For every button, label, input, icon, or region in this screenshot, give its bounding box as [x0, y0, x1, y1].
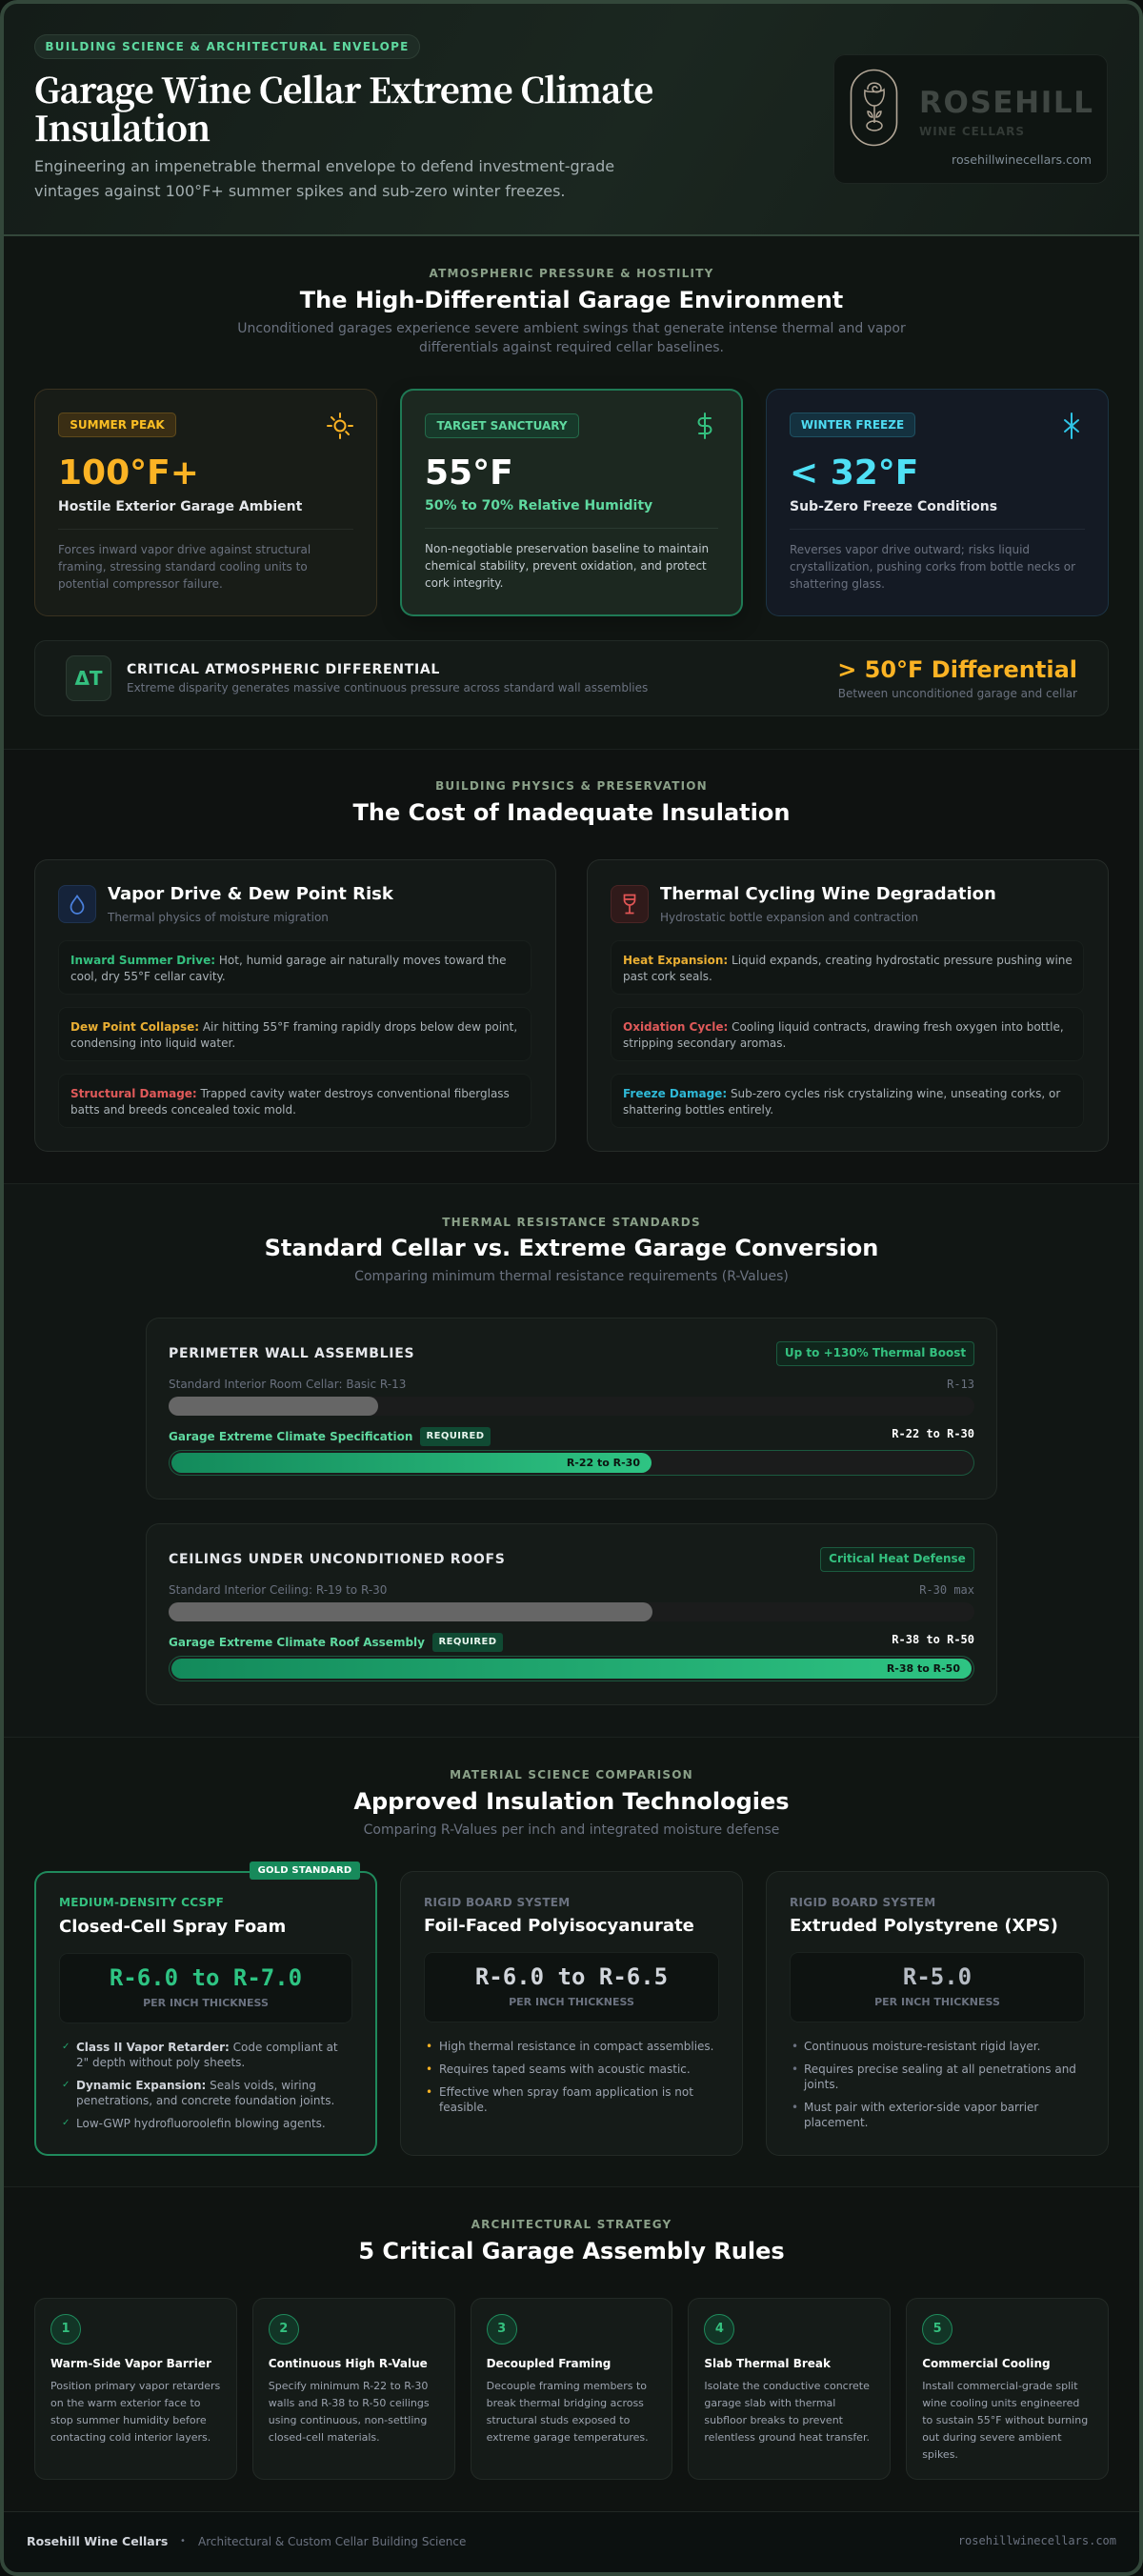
bullet list: Class II Vapor Retarder: Code compliant at [76, 2041, 338, 2054]
item: inward summer drive: Inward Summer Drive: Hot, humid garage air naturally moves toward the [70, 954, 507, 967]
rule text: out during severe ambient [922, 2431, 1062, 2444]
callout title: CRITICAL ATMOSPHERIC DIFFERENTIAL [127, 662, 440, 677]
section: garage environment [0, 236, 1143, 749]
bullet list: • [792, 2101, 798, 2114]
rule text: garage slab with thermal [704, 2397, 835, 2409]
callout: critical differential [34, 640, 1109, 716]
footer [4, 2511, 1139, 2572]
panel: vapor drive [34, 859, 556, 1152]
tag: TARGET SANCTUARY [436, 419, 568, 433]
item: oxidation cycle [611, 1007, 1084, 1061]
rule text: extreme garage temperatures. [487, 2431, 649, 2444]
R-value box [790, 1952, 1085, 2023]
unit: PER INCH THICKNESS [509, 1996, 634, 2008]
tag [58, 413, 176, 437]
rule text: structural studs exposed to [487, 2414, 630, 2426]
rule text [487, 2380, 649, 2444]
panel title: CEILINGS UNDER UNCONDITIONED ROOFS [169, 1552, 506, 1567]
bullet list: placement. [804, 2116, 868, 2129]
bullet list: feasible. [439, 2101, 488, 2114]
item: structural damage [58, 1074, 531, 1128]
rule 2 [252, 2298, 455, 2480]
badge: gold standard [250, 1862, 360, 1880]
panel: polyisocyanurate [400, 1871, 743, 2156]
panel title: PERIMETER WALL ASSEMBLIES [169, 1346, 414, 1361]
section eyebrow: MATERIAL SCIENCE COMPARISON [450, 1768, 693, 1781]
rule 1 [34, 2298, 237, 2480]
rule text: stop summer humidity before [50, 2414, 207, 2426]
item: freeze damage: shattering bottles entirely. [623, 1103, 773, 1117]
panel: winter freeze [766, 389, 1109, 616]
callout tag [776, 1341, 974, 1366]
subtitle: Hostile Exterior Garage Ambient [58, 499, 302, 514]
standard label: Standard Interior Ceiling: R-19 to R-30 [169, 1583, 387, 1597]
rule text: subfloor breaks to prevent [704, 2414, 843, 2426]
garage bar [169, 1656, 974, 1681]
bullet list: joints. [804, 2078, 838, 2091]
logo url: rosehillwinecellars.com [952, 152, 1092, 167]
rule title: Slab Thermal Break [704, 2357, 831, 2370]
item: oxidation cycle: stripping secondary aromas. [623, 1036, 786, 1050]
rule text: relentless ground heat transfer. [704, 2431, 870, 2444]
category: MEDIUM-DENSITY CCSPF [59, 1896, 224, 1909]
panel: thermal cycling [587, 859, 1109, 1152]
rule text [269, 2380, 430, 2444]
garage label: Garage Extreme Climate Specification [169, 1430, 412, 1443]
rule text: Isolate the conductive concrete [704, 2380, 870, 2392]
rule text: on the warm exterior face to [50, 2397, 200, 2409]
rule text: using continuous, non-settling [269, 2414, 427, 2426]
R-value: R-5.0 [903, 1963, 972, 1990]
item: heat expansion [611, 940, 1084, 995]
header subtitle: Engineering an impenetrable thermal envelope to defend investment-grade [34, 157, 614, 175]
panel: extruded polystyrene [766, 1871, 1109, 2156]
panel: perimeter wall assemblies [146, 1318, 997, 1499]
description [58, 543, 311, 591]
icon: delta T [66, 655, 111, 701]
section heading: Standard Cellar vs. Extreme Garage Conversion [265, 1235, 878, 1261]
rule text [50, 2380, 220, 2444]
garage value: R-22 to R-30 [892, 1427, 974, 1440]
number badge [704, 2314, 734, 2345]
description: cork integrity. [425, 576, 503, 590]
R-value: R-6.0 to R-7.0 [110, 1964, 302, 1991]
panel title: Vapor Drive & Dew Point Risk [108, 884, 393, 904]
bullet list: Continuous moisture-resistant rigid layer. [804, 2040, 1040, 2053]
item: structural damage: Structural Damage: Trapped cavity water destroys conventional fiberglass [70, 1087, 510, 1100]
standard bar [169, 1397, 974, 1416]
subtitle: 50% to 70% Relative Humidity [425, 498, 652, 513]
differential note: Between unconditioned garage and cellar [838, 687, 1077, 700]
description: potential compressor failure. [58, 577, 223, 591]
logo mark and wordmark: WINE CELLARS [919, 125, 1024, 138]
footer brand: Rosehill Wine Cellars [27, 2534, 168, 2548]
rule title: Continuous High R-Value [269, 2357, 428, 2370]
rule text: Decouple framing members to [487, 2380, 647, 2392]
number badge [922, 2314, 952, 2345]
section: insulation technologies [0, 1737, 1143, 2186]
garage label: Garage Extreme Climate Roof Assembly [169, 1636, 425, 1649]
rule 5 [906, 2298, 1109, 2480]
section eyebrow: ARCHITECTURAL STRATEGY [471, 2218, 672, 2231]
temperature: 100°F+ [58, 453, 199, 493]
bullet list: penetrations, and concrete foundation joints. [76, 2094, 334, 2107]
section: cost of inadequate insulation [0, 749, 1143, 1183]
tag [425, 413, 579, 438]
section heading: 5 Critical Garage Assembly Rules [358, 2238, 785, 2264]
description: shattering glass. [790, 577, 885, 591]
panel title: Thermal Cycling Wine Degradation [660, 884, 996, 904]
header subtitle: vintages against 100°F+ summer spikes and sub-zero winter freezes. [34, 182, 566, 200]
description: chemical stability, prevent oxidation, and protect [425, 559, 707, 573]
main title [34, 65, 653, 151]
rule title: Decoupled Framing [487, 2357, 611, 2370]
bullet list: Effective when spray foam application is not [439, 2085, 693, 2099]
differential value: > 50°F Differential [837, 656, 1077, 683]
section description [237, 321, 906, 355]
bullet list: • [792, 2063, 798, 2076]
item: freeze damage: Freeze Damage: Sub-zero cycles risk crystalizing wine, unseating corks, or [623, 1087, 1060, 1100]
icon: sun [327, 413, 353, 439]
logo panel [833, 54, 1108, 184]
rule 4 [688, 2298, 891, 2480]
section: standard vs extreme [0, 1183, 1143, 1737]
callout tag: Up to +130% Thermal Boost [785, 1346, 966, 1359]
rule text [704, 2380, 870, 2444]
standard label: Standard Interior Room Cellar: Basic R-13 [169, 1378, 406, 1391]
icon: droplet [58, 885, 96, 923]
bullet list: ✓ [62, 2042, 70, 2052]
title: Extruded Polystyrene (XPS) [790, 1916, 1058, 1936]
item: freeze damage [611, 1074, 1084, 1128]
callout tag [820, 1547, 974, 1572]
required badge: REQUIRED [439, 1637, 496, 1647]
bullet list: Low-GWP hydrofluoroolefin blowing agents. [76, 2117, 326, 2130]
bullet list: Requires precise sealing at all penetrations and [804, 2063, 1076, 2076]
section eyebrow: BUILDING PHYSICS & PRESERVATION [435, 779, 708, 793]
item: dew point collapse [58, 1007, 531, 1061]
main title: Garage Wine Cellar Extreme Climate [34, 65, 653, 113]
section eyebrow: THERMAL RESISTANCE STANDARDS [442, 1216, 701, 1229]
section: assembly rules [0, 2186, 1143, 2511]
number badge: 1 [61, 2322, 70, 2336]
bullet list: ✓ [62, 2118, 70, 2128]
category: RIGID BOARD SYSTEM [424, 1896, 571, 1909]
rule text: break thermal bridging across [487, 2397, 644, 2409]
rule text [922, 2380, 1088, 2461]
tag: WINTER FREEZE [801, 418, 904, 432]
bullet list: • [426, 2063, 432, 2076]
number badge: 5 [933, 2322, 942, 2336]
rule text: closed-cell materials. [269, 2431, 380, 2444]
icon: dollar [697, 413, 712, 439]
bullet list [426, 2040, 714, 2114]
section eyebrow: ATMOSPHERIC PRESSURE & HOSTILITY [430, 267, 713, 280]
title: Foil-Faced Polyisocyanurate [424, 1916, 694, 1936]
icon: snowflake [1064, 413, 1079, 439]
description: Non-negotiable preservation baseline to maintain [425, 542, 709, 555]
section heading: The High-Differential Garage Environment [300, 287, 843, 313]
item: inward summer drive [58, 940, 531, 995]
header subtitle [34, 157, 614, 200]
rule text: contacting cold interior layers. [50, 2431, 211, 2444]
bullet list: • [426, 2040, 432, 2053]
R-value: R-6.0 to R-6.5 [475, 1963, 668, 1990]
item: oxidation cycle: Oxidation Cycle: Cooling liquid contracts, drawing fresh oxygen into bottle, [623, 1020, 1064, 1034]
R-value box [59, 1953, 352, 2023]
section subtitle: Comparing R-Values per inch and integrated moisture defense [364, 1822, 779, 1838]
item: heat expansion: past cork seals. [623, 970, 712, 983]
bullet list: Requires taped seams with acoustic mastic. [439, 2063, 691, 2076]
rule 3 [471, 2298, 672, 2480]
temperature: 55°F [425, 453, 513, 493]
R-value box [424, 1952, 719, 2023]
description [790, 543, 1076, 591]
rule text: Specify minimum R-22 to R-30 [269, 2380, 428, 2392]
title: Closed-Cell Spray Foam [59, 1917, 286, 1937]
unit: PER INCH THICKNESS [874, 1996, 1000, 2008]
description: framing, stressing standard cooling units to [58, 560, 308, 574]
bullet list [792, 2040, 1076, 2129]
bullet list: • [792, 2040, 798, 2053]
tag [790, 413, 915, 437]
description: Reverses vapor drive outward; risks liquid [790, 543, 1030, 556]
panel subtitle: Hydrostatic bottle expansion and contraction [660, 911, 918, 924]
panel: summer peak [34, 389, 377, 616]
item: dew point collapse: Dew Point Collapse: Air hitting 55°F framing rapidly drops below dew point, [70, 1020, 517, 1034]
description [425, 542, 709, 590]
required badge [420, 1427, 491, 1446]
bullet list: ✓ [62, 2080, 70, 2090]
rule text: walls and R-38 to R-50 ceilings [269, 2397, 430, 2409]
rule title: Commercial Cooling [922, 2357, 1051, 2370]
category: RIGID BOARD SYSTEM [790, 1896, 936, 1909]
standard value: R-13 [947, 1378, 974, 1391]
description: Forces inward vapor drive against structural [58, 543, 311, 556]
footer separator: • [180, 2536, 186, 2546]
rule title: Warm-Side Vapor Barrier [50, 2357, 211, 2370]
section subtitle: Comparing minimum thermal resistance requirements (R-Values) [354, 1269, 789, 1284]
subtitle: Sub-Zero Freeze Conditions [790, 499, 997, 514]
section heading: Approved Insulation Technologies [353, 1788, 790, 1815]
rule text: spikes. [922, 2448, 958, 2461]
bullet list: Dynamic Expansion: Seals voids, wiring [76, 2079, 316, 2092]
bullet list: 2" depth without poly sheets. [76, 2056, 245, 2069]
header [4, 4, 1139, 236]
callout tag: Critical Heat Defense [829, 1552, 966, 1565]
main title: Insulation [34, 103, 211, 151]
number badge [269, 2314, 299, 2345]
panel subtitle: Thermal physics of moisture migration [108, 911, 329, 924]
required badge: REQUIRED [427, 1431, 484, 1441]
unit: PER INCH THICKNESS [143, 1997, 269, 2009]
icon: delta T: ΔT [74, 667, 103, 690]
garage value: R-38 to R-50 [892, 1633, 974, 1646]
header badge [34, 34, 420, 59]
rule text: to sustain 55°F without burning [922, 2414, 1088, 2426]
number badge [50, 2314, 81, 2345]
rule text: Install commercial-grade split [922, 2380, 1078, 2392]
number badge: 3 [497, 2322, 506, 2336]
item: dew point collapse: condensing into liquid water. [70, 1036, 235, 1050]
bullet list: High thermal resistance in compact assemblies. [439, 2040, 714, 2053]
item: heat expansion: Heat Expansion: Liquid expands, creating hydrostatic pressure pushing wine [623, 954, 1073, 967]
number badge [487, 2314, 517, 2345]
garage bar: R-38 to R-50 [887, 1662, 960, 1675]
panel: target sanctuary [400, 389, 743, 616]
rule text: Position primary vapor retarders [50, 2380, 220, 2392]
panel: closed-cell spray foam [34, 1871, 377, 2156]
item: inward summer drive: cool, dry 55°F cellar cavity. [70, 970, 226, 983]
bullet list: Must pair with exterior-side vapor barrier [804, 2101, 1038, 2114]
icon: wine glass [611, 885, 649, 923]
number badge: 2 [279, 2322, 288, 2336]
callout text: Extreme disparity generates massive continuous pressure across standard wall assemblies [127, 681, 648, 694]
section description: Unconditioned garages experience severe ambient swings that generate intense thermal and vapor [237, 321, 906, 336]
section description: differentials against required cellar baselines. [419, 340, 724, 355]
garage bar: R-22 to R-30 [567, 1457, 640, 1469]
bullet list: • [426, 2085, 432, 2099]
logo mark and wordmark [850, 69, 1093, 147]
standard bar [169, 1602, 974, 1621]
standard value: R-30 max [919, 1583, 974, 1597]
bullet list [62, 2041, 338, 2130]
description: crystallization, pushing corks from bottle necks or [790, 560, 1075, 574]
garage bar [169, 1450, 974, 1476]
rule text: wine cooling units engineered [922, 2397, 1079, 2409]
temperature: < 32°F [790, 453, 918, 493]
section heading: The Cost of Inadequate Insulation [353, 799, 790, 826]
badge: gold standard: GOLD STANDARD [258, 1865, 351, 1876]
panel: ceilings [146, 1523, 997, 1705]
number badge: 4 [715, 2322, 724, 2336]
logo mark and wordmark: ROSEHILL [919, 86, 1093, 120]
required badge [432, 1633, 503, 1652]
footer descriptor: Architectural & Custom Cellar Building Science [198, 2535, 466, 2548]
item: structural damage: batts and breeds concealed toxic mold. [70, 1103, 296, 1117]
tag: SUMMER PEAK [70, 418, 165, 432]
footer url: rosehillwinecellars.com [958, 2534, 1116, 2547]
header badge: BUILDING SCIENCE & ARCHITECTURAL ENVELOPE [45, 40, 410, 53]
